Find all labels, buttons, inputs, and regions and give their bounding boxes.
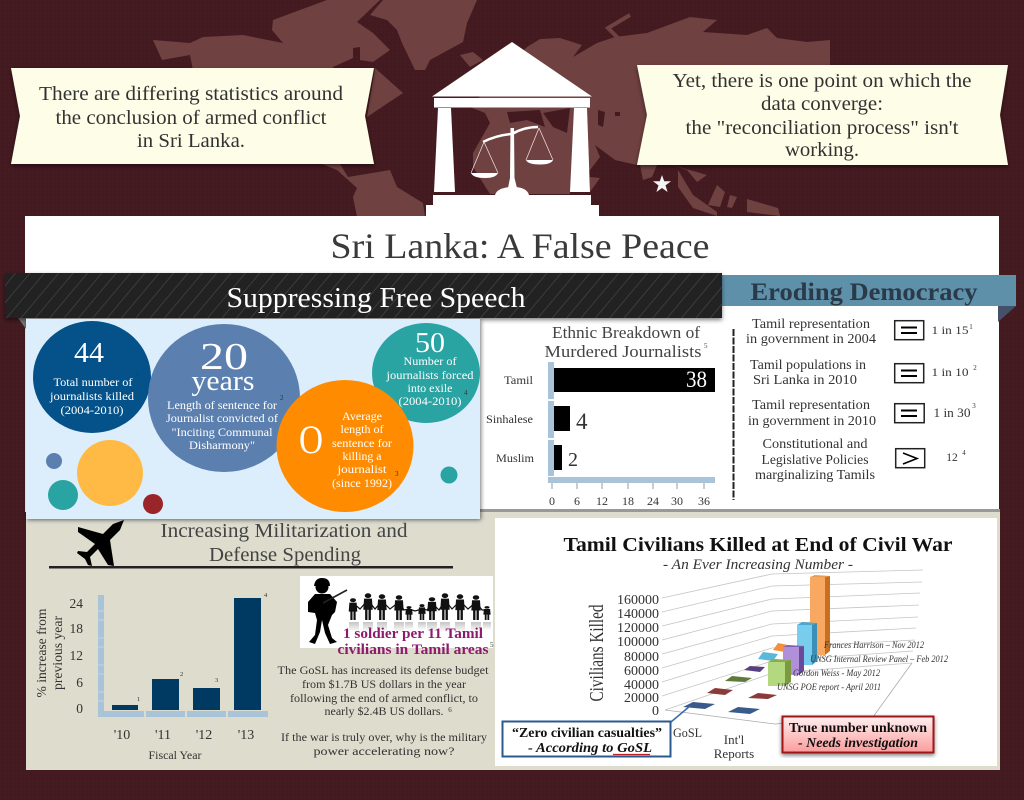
y axis numbers: 140000 <box>617 607 659 622</box>
category labels: GoSL <box>673 725 702 740</box>
chart title: Murdered Journalists <box>544 342 702 361</box>
map: peninsula beside banner <box>367 68 403 117</box>
world map backdrop <box>153 0 830 217</box>
bubble: 0 average: Average <box>342 409 382 423</box>
band fold: speech <box>18 318 26 329</box>
bar chart: defense budget increase: '11 <box>155 728 171 743</box>
bar values: 38 <box>686 367 707 392</box>
chart: ethnic breakdown of murdered journalists <box>486 323 715 508</box>
axis numbers: 30 <box>671 494 683 508</box>
budget paragraph: power accelerating now? <box>314 744 454 758</box>
row: population 2010: 1 in 10 <box>932 365 968 379</box>
heading: Increasing Militarization and <box>160 520 408 542</box>
row: policies: 12 <box>946 452 958 464</box>
row: representation 2010: 1 in 30 <box>934 405 970 420</box>
icon: courthouse with scales <box>426 42 599 217</box>
row: representation 2004: Tamil representation <box>752 316 870 331</box>
budget paragraph: 6 <box>448 706 452 714</box>
panel: militarization <box>26 519 495 770</box>
soldier to civilians graphic: 1 soldier per 11 Tamil <box>343 626 483 642</box>
callout: true number unknown: - Needs investigation <box>798 736 918 751</box>
y axis numbers: 0 <box>652 704 659 719</box>
soldier to civilians graphic: civilians in Tamil areas <box>338 642 489 658</box>
bubble: 50 exiled <box>372 323 480 423</box>
bubble: 0 average <box>276 380 414 512</box>
band: Suppressing Free Speech <box>5 273 722 318</box>
bar chart: defense budget increase: previous year <box>51 616 66 690</box>
panel: Tamil civilians killed <box>495 518 997 766</box>
main white panel <box>25 216 999 512</box>
banner: differing statistics: the conclusion of armed conflict <box>56 107 327 129</box>
dashed divider <box>732 329 734 500</box>
category labels: Muslim <box>496 451 535 465</box>
banner: differing statistics: There are differing statistics around <box>39 83 343 105</box>
chart title: 5 <box>704 342 708 350</box>
heading: Defense Spending <box>209 544 361 566</box>
row: representation 2004: 1 in 15 <box>932 323 968 337</box>
row: representation 2010: in government in 2010 <box>748 413 876 428</box>
bar chart: defense budget increase: 12 <box>70 648 83 663</box>
3D series labels: Frances Harrison – Nov 2012 <box>823 641 924 651</box>
bubble: 0 average: 3 <box>395 470 399 478</box>
y axis numbers: 60000 <box>624 664 659 679</box>
bubble: 0 average: (since 1992) <box>332 476 392 490</box>
banner: data converge: working. <box>785 139 859 161</box>
bubble: 20 years: Length of sentence for <box>167 398 277 412</box>
family reflection <box>349 622 491 632</box>
bar chart: defense budget increase: 4 <box>264 592 268 599</box>
bar chart: defense budget increase: 1 <box>137 696 140 703</box>
callout: true number unknown: True number unknown <box>789 721 927 736</box>
row: policies <box>755 436 966 482</box>
row: policies: Constitutional and <box>762 436 868 451</box>
budget paragraph <box>278 663 489 758</box>
bar chart: defense budget increase: '12 <box>196 728 212 743</box>
bubble: 0 average: length of <box>340 422 384 436</box>
3D flat markers <box>683 643 788 714</box>
axis numbers: 12 <box>596 494 608 508</box>
bubble: 20 years: Disharmony" <box>189 438 255 452</box>
panel: Tamil civilians killed: - An Ever Increasing Number - <box>663 557 853 573</box>
band: Eroding Democracy: Eroding Democracy <box>750 279 978 306</box>
row: representation 2010 <box>748 397 976 428</box>
row: representation 2004: in government in 2004 <box>746 331 876 346</box>
bubble: 50 exiled: (2004-2010) <box>398 394 462 408</box>
bubble: 20 years: Journalist convicted of <box>166 411 278 425</box>
bubble: 44 killed: (2004-2010) <box>60 403 124 417</box>
arrow: GoSL callout pointer <box>671 706 690 722</box>
3D chart grid <box>662 570 923 724</box>
axes <box>548 362 715 483</box>
bar chart: defense budget increase: 24 <box>70 596 83 611</box>
bar chart: defense budget increase: Fiscal Year <box>148 748 202 762</box>
callout: true number unknown <box>782 716 934 752</box>
category labels: Sinhalese <box>486 412 533 426</box>
axis numbers: 6 <box>574 494 580 508</box>
category labels <box>673 725 754 761</box>
row: population 2010: Tamil populations in <box>750 357 866 372</box>
band: Eroding Democracy <box>722 275 1016 322</box>
title: Sri Lanka: A False Peace <box>330 226 710 266</box>
y axis numbers <box>617 593 659 719</box>
y axis numbers: 20000 <box>624 691 659 706</box>
budget paragraph: If the war is truly over, why is the military <box>281 730 487 744</box>
category labels <box>486 373 535 465</box>
bar chart: defense budget increase: 0 <box>76 701 83 716</box>
bar chart: defense budget increase <box>35 592 268 762</box>
map: dark inlets <box>507 108 620 133</box>
axis numbers <box>549 494 710 508</box>
bubble: 50 exiled: 4 <box>464 389 468 397</box>
banner: data converge: data converge: <box>761 93 883 115</box>
map: southern islands <box>590 165 780 216</box>
bar chart: defense budget increase: 18 <box>70 621 83 636</box>
bubble: 0 average: O <box>299 417 323 462</box>
bubble: 0 average: journalist <box>336 462 387 476</box>
callout: zero civilian casualties <box>502 722 670 756</box>
budget paragraph: from $1.7B US dollars in the year <box>302 677 466 691</box>
bubble: 20 years: 2 <box>280 394 284 402</box>
y axis numbers: 40000 <box>624 678 659 693</box>
map: north landmass <box>370 0 477 70</box>
budget paragraph: nearly $2.4B US dollars. <box>324 704 444 718</box>
axis numbers: 36 <box>698 494 710 508</box>
row: policies: marginalizing Tamils <box>755 467 875 482</box>
banner: differing statistics: in Sri Lanka. <box>137 130 245 152</box>
banner: data converge: Yet, there is one point on which the <box>672 70 972 92</box>
heading <box>160 520 408 566</box>
icon: soldier <box>308 578 347 644</box>
y axis numbers: 120000 <box>617 621 659 636</box>
row: policies: 4 <box>962 449 966 457</box>
category labels: Reports <box>714 746 754 761</box>
bubble: 0 average: sentence for <box>332 436 392 450</box>
lower beige backdrop <box>26 509 1000 770</box>
map: northern hook <box>608 15 630 40</box>
3D series labels: UNSG POE report - April 2011 <box>777 683 881 693</box>
bar chart: defense budget increase: 3 <box>215 677 218 684</box>
icon: star <box>653 175 671 192</box>
y axis numbers: 160000 <box>617 593 659 608</box>
bar chart: defense budget increase: 6 <box>76 675 83 690</box>
axis numbers: 18 <box>622 494 634 508</box>
category labels: Int'l <box>724 732 745 747</box>
bubble: 20 years: years <box>192 365 254 397</box>
bars <box>554 368 715 470</box>
bubble: 44 killed: 1 <box>136 372 139 378</box>
bubble: 44 killed: Total number of <box>54 375 133 389</box>
bubble: 50 exiled: Number of <box>404 354 456 368</box>
soldier to civilians graphic <box>300 576 494 658</box>
bubble: 20 years <box>148 324 300 472</box>
map: west landmass <box>153 0 390 70</box>
bubble: 50 exiled: 50 <box>415 327 445 359</box>
bubble: 20 years: "Inciting Communal <box>172 425 273 439</box>
chart title: Ethnic Breakdown of <box>552 323 700 342</box>
bubble: 50 exiled: into exile <box>408 381 452 395</box>
row: population 2010: Sri Lanka in 2010 <box>753 372 857 387</box>
bubble: 0 average: killing a <box>342 449 382 463</box>
bubble: 44 killed: journalists killed <box>49 389 134 403</box>
row: representation 2010: 3 <box>972 402 976 410</box>
3D series labels: UNSG Internal Review Panel – Feb 2012 <box>810 655 948 665</box>
row: representation 2010: Tamil representation <box>752 397 870 412</box>
row: population 2010 <box>750 357 977 387</box>
bubble: 44 killed: 44 <box>74 338 104 369</box>
chart title <box>544 323 708 361</box>
bar chart: defense budget increase: 2 <box>180 671 183 678</box>
banner: differing statistics <box>11 68 374 164</box>
callout: zero civilian casualties: “Zero civilian casualties” <box>512 726 662 741</box>
budget paragraph: The GoSL has increased its defense budget <box>278 663 489 677</box>
map: south-west landmass <box>322 164 425 217</box>
budget paragraph: following the end of armed conflict, to <box>290 691 478 705</box>
bar chart: defense budget increase: '10 <box>114 728 130 743</box>
3D series labels: Gordon Weiss - May 2012 <box>793 669 880 679</box>
soldier to civilians graphic: 5 <box>490 641 494 649</box>
decorative small bubbles <box>46 440 458 514</box>
row: representation 2004 <box>746 316 973 346</box>
icon: airplane <box>77 520 124 566</box>
chart: ethnic breakdown of murdered journalists: 4 <box>576 409 588 434</box>
banner: data converge <box>637 65 1008 165</box>
banner: data converge: the "reconciliation process" isn't <box>686 117 959 139</box>
row: representation 2004: 1 <box>969 323 973 331</box>
callout: zero civilian casualties: - According to GoSL <box>528 741 652 756</box>
band: Suppressing Free Speech: Suppressing Free Speech <box>226 283 526 314</box>
map: sliver by pediment <box>460 52 483 67</box>
panel: Tamil civilians killed: Civilians Killed <box>586 604 608 702</box>
axis numbers: 24 <box>647 494 659 508</box>
bar chart: defense budget increase: '13 <box>238 728 254 743</box>
icon: scales of justice <box>471 127 553 195</box>
map: east landmass <box>470 17 830 194</box>
bubble: 50 exiled: journalists forced <box>385 368 474 382</box>
3D series labels <box>777 641 948 693</box>
bar chart: defense budget increase: % increase from <box>35 608 50 698</box>
row: policies: Legislative Policies <box>762 452 868 467</box>
3D bars <box>768 575 830 686</box>
y axis numbers: 100000 <box>617 635 659 650</box>
icon: family row <box>349 593 491 620</box>
row: population 2010: 2 <box>973 364 977 372</box>
chart: ethnic breakdown of murdered journalists: 2 <box>568 449 578 471</box>
panel: journalist bubbles <box>26 319 480 519</box>
y axis numbers: 80000 <box>624 650 659 665</box>
panel: eroding democracy comparisons <box>746 316 977 482</box>
category labels: Tamil <box>504 373 534 387</box>
axis numbers: 0 <box>549 494 555 508</box>
bubble: 20 years: 20 <box>200 336 248 378</box>
chart heading: Tamil Civilians Killed at End of Civil War <box>564 534 952 556</box>
bubble: 44 killed <box>33 321 151 433</box>
